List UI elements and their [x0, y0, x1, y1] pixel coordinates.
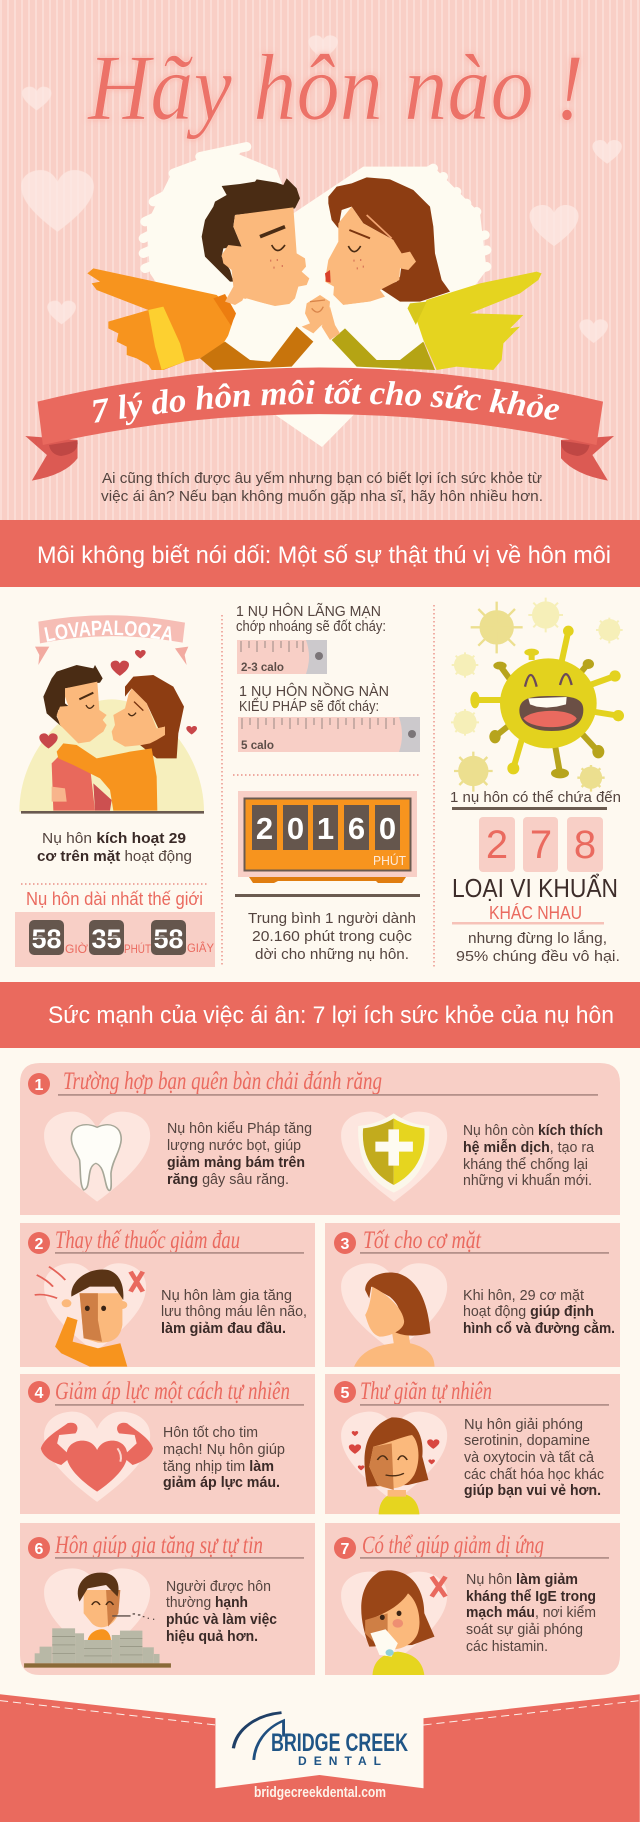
icon: man behind stacks of money [24, 1568, 171, 1668]
counter: 20160 minutes: 2 [256, 811, 273, 846]
longest kiss counter: GIÂY [187, 940, 214, 955]
woman hair [125, 675, 184, 758]
text: romantic kiss: chớp nhoáng sẽ đốt cháy: [236, 618, 386, 635]
longest kiss counter [15, 912, 215, 967]
text: thường hạnh [166, 1594, 248, 1611]
panel: benefit 6 [20, 1523, 315, 1675]
footer [0, 1694, 640, 1822]
text: lưu thông máu lên não, [161, 1303, 307, 1320]
ribbon: 7 lý do hôn môi tốt cho sức khỏe [93, 379, 560, 426]
man hair [202, 178, 300, 282]
large virus light spikes [475, 631, 618, 768]
text left: giảm mảng bám trên [167, 1154, 305, 1171]
text: Nụ hôn làm giảm [466, 1571, 578, 1588]
ruler: 5 calo: 5 calo [241, 738, 274, 752]
woman face [325, 207, 416, 305]
panel: lovapalooza: LOVAPALOOZA [44, 620, 172, 642]
counter: 20160 minutes: 1 [317, 811, 334, 846]
man sweater arm [87, 268, 235, 370]
panel: benefit 1 [20, 1063, 620, 1215]
ruler: 2-3 calo [237, 640, 327, 674]
man face [57, 682, 107, 743]
woman sweater arm [417, 272, 542, 370]
background hearts [21, 35, 622, 343]
panel: benefit 7: 7 [341, 1541, 350, 1558]
icon: woman profile [341, 1263, 447, 1367]
section heading: benefits: Sức mạnh của việc ái ân: 7 lợi ích sức khỏe của nụ hôn [48, 1002, 614, 1029]
heading: Có thể giúp giảm dị ứng [362, 1532, 544, 1559]
orange arm [57, 743, 157, 811]
caption: 20.160 phút trong cuộc [252, 928, 413, 945]
text: hình cổ và đường cằm. [463, 1319, 615, 1337]
text left: răng gây sâu răng. [167, 1171, 289, 1188]
text: bacteria types: LOẠI VI KHUẨN [452, 873, 618, 903]
longest kiss counter: GIỜ [65, 941, 89, 956]
clasped hands [302, 295, 330, 333]
ribbon banner [35, 647, 49, 665]
text: mạch! Nụ hôn giúp [163, 1441, 285, 1458]
panel: benefit 2 [20, 1223, 315, 1367]
number tiles: 278: 2 [486, 823, 508, 867]
logo: BRIDGE CREEK [271, 1729, 408, 1757]
longest kiss counter: 58 [153, 924, 184, 954]
illustration: viruses [451, 598, 624, 792]
text: bacteria types: nhưng đừng lo lắng, [468, 930, 607, 947]
ruler: 5 calo [238, 717, 420, 752]
number badge [28, 1073, 50, 1095]
text [463, 1287, 615, 1337]
text right: kháng thể chống lại [463, 1156, 588, 1173]
shoulders [200, 327, 313, 370]
collars [227, 298, 317, 360]
heading: Thay thế thuốc giảm đau [55, 1227, 240, 1254]
heading: Tốt cho cơ mặt [363, 1227, 482, 1254]
panel: benefit 4: 4 [35, 1385, 44, 1402]
text: kháng thể IgE trong [466, 1588, 596, 1605]
virus face [525, 674, 572, 687]
caption: Trung bình 1 người dành [248, 910, 416, 927]
heading: Hôn giúp gia tăng sự tự tin [54, 1532, 263, 1559]
text: hoạt động giúp định [463, 1303, 594, 1320]
icon: headache man [35, 1263, 146, 1367]
text left [167, 1120, 312, 1188]
logo: DENTAL [298, 1754, 381, 1768]
panel: benefit 7 [325, 1523, 620, 1675]
text [166, 1578, 277, 1645]
caption [248, 910, 416, 963]
longest kiss heading: Nụ hôn dài nhất thế giới [26, 889, 203, 909]
icon: happy woman [341, 1412, 447, 1514]
longest kiss counter: 35 [91, 924, 122, 954]
man hair [43, 665, 103, 727]
counter: 20160 minutes: 6 [348, 811, 365, 846]
text: Người được hôn [166, 1578, 271, 1595]
number tiles: 278 [479, 817, 603, 872]
icon: muscular heart [41, 1412, 153, 1502]
counter: 20160 minutes [238, 791, 417, 883]
longest kiss counter: 58 [31, 924, 62, 954]
icon: shield [358, 1113, 429, 1193]
section heading: facts: Môi không biết nói dối: Một số sự thật thú vị về hôn môi [37, 542, 611, 569]
ribbon [25, 368, 614, 481]
panel: bacteria [450, 598, 624, 965]
intro text [101, 470, 543, 505]
text: bacteria types [452, 873, 620, 965]
large virus dark spikes [495, 663, 598, 773]
text right: hệ miễn dịch, tạo ra [463, 1139, 595, 1156]
text [163, 1424, 285, 1491]
ruler: 2-3 calo: 2-3 calo [241, 660, 284, 674]
arc backdrop [19, 699, 204, 812]
logo [271, 1729, 408, 1768]
heading: Giảm áp lực một cách tự nhiên [55, 1378, 290, 1405]
number tiles: 278: 8 [574, 823, 596, 867]
text: làm giảm đau đầu. [161, 1320, 286, 1337]
text: romantic kiss [236, 603, 386, 635]
woman face [112, 688, 165, 747]
number badge: 1 [35, 1077, 44, 1094]
text: serotinin, dopamine [464, 1432, 590, 1449]
caption [37, 830, 192, 865]
text left: Nụ hôn kiểu Pháp tăng [167, 1120, 312, 1137]
text [466, 1571, 596, 1655]
text: tăng nhịp tim làm [163, 1458, 274, 1475]
counter: 20160 minutes: 0 [379, 811, 396, 846]
panel: benefit 3: 3 [341, 1236, 350, 1253]
text: mạch máu, nơi kiểm [466, 1604, 596, 1621]
panel: benefit 5: 5 [341, 1385, 350, 1402]
heading: Trường hợp bạn quên bàn chải đánh răng [63, 1068, 382, 1095]
text: bacteria types: 95% chúng đều vô hại. [456, 948, 620, 965]
intro text: việc ái ân? Nếu bạn không muốn gặp nha sĩ, hãy hôn nhiều hơn. [101, 488, 543, 505]
text: Hôn tốt cho tim [163, 1424, 258, 1441]
text: bacteria types: KHÁC NHAU [489, 903, 582, 923]
longest kiss counter: PHÚT [124, 941, 152, 956]
text: soát sự giải phóng [466, 1621, 583, 1638]
counter: 20160 minutes: PHÚT [373, 853, 406, 868]
text: romantic kiss: 1 NỤ HÔN LÃNG MẠN [236, 603, 381, 620]
man shirt [52, 755, 95, 811]
heading: Thư giãn tự nhiên [360, 1378, 492, 1405]
text: Nụ hôn làm gia tăng [161, 1287, 292, 1304]
text right: những vi khuẩn mới. [463, 1172, 592, 1189]
number tiles: 278: 7 [530, 823, 552, 867]
text: và oxytocin và tất cả [464, 1449, 595, 1466]
caption: dời cho những nụ hôn. [255, 946, 409, 963]
text: các histamin. [466, 1638, 548, 1655]
text: giúp bạn vui vẻ hơn. [464, 1482, 601, 1499]
icon: woman with allergy [341, 1570, 447, 1675]
text: phúc và làm việc [166, 1611, 277, 1628]
title: Hãy hôn nào ! [86, 36, 584, 140]
panel: facts column dividers [21, 605, 434, 967]
text right: Nụ hôn còn kích thích [463, 1122, 603, 1139]
face details [260, 227, 285, 237]
panel: benefit 3 [325, 1223, 620, 1367]
text: Khi hôn, 29 cơ mặt [463, 1287, 585, 1304]
text: french kiss [239, 682, 389, 715]
caption: Nụ hôn kích hoạt 29 [42, 830, 186, 847]
text [161, 1287, 307, 1337]
text: Nụ hôn giải phóng [464, 1416, 583, 1433]
panel: benefit 5 [325, 1374, 620, 1514]
panel: benefit 6: 6 [35, 1541, 44, 1558]
website url: bridgecreekdental.com [254, 1784, 386, 1801]
logo arcs [233, 1713, 282, 1748]
title: Hãy hôn nào ! [86, 36, 584, 140]
text: french kiss: 1 NỤ HÔN NỒNG NÀN [239, 682, 389, 700]
panel: benefit 2: 2 [35, 1236, 44, 1253]
woman hair [328, 177, 450, 302]
text: french kiss: KIỂU PHÁP sẽ đốt cháy: [239, 697, 379, 715]
man face [222, 207, 309, 307]
illustration: kissing couple with scribble heart [87, 147, 542, 447]
text: hiệu quả hơn. [166, 1628, 258, 1645]
text [464, 1416, 604, 1499]
panel: hero [0, 0, 640, 520]
hearts [111, 661, 129, 676]
section heading: benefits [0, 982, 640, 1048]
icon: tooth [71, 1125, 121, 1191]
section heading: facts [0, 520, 640, 587]
text: giảm áp lực máu. [163, 1474, 280, 1491]
panel: calories [235, 603, 420, 963]
text right [463, 1122, 603, 1189]
scribble heart [147, 153, 487, 447]
small viruses [454, 602, 605, 792]
panel: benefit 4 [20, 1374, 315, 1514]
text: các chất hóa học khác [464, 1466, 604, 1483]
text: can contain: 1 nụ hôn có thể chứa đến [450, 789, 621, 806]
panel: lovapalooza [15, 615, 215, 967]
intro text: Ai cũng thích được âu yếm nhưng bạn có biết lợi ích sức khỏe từ [102, 470, 542, 487]
caption: cơ trên mặt hoạt động [37, 848, 192, 865]
text left: lượng nước bọt, giúp [167, 1137, 301, 1154]
counter: 20160 minutes: 0 [287, 811, 304, 846]
